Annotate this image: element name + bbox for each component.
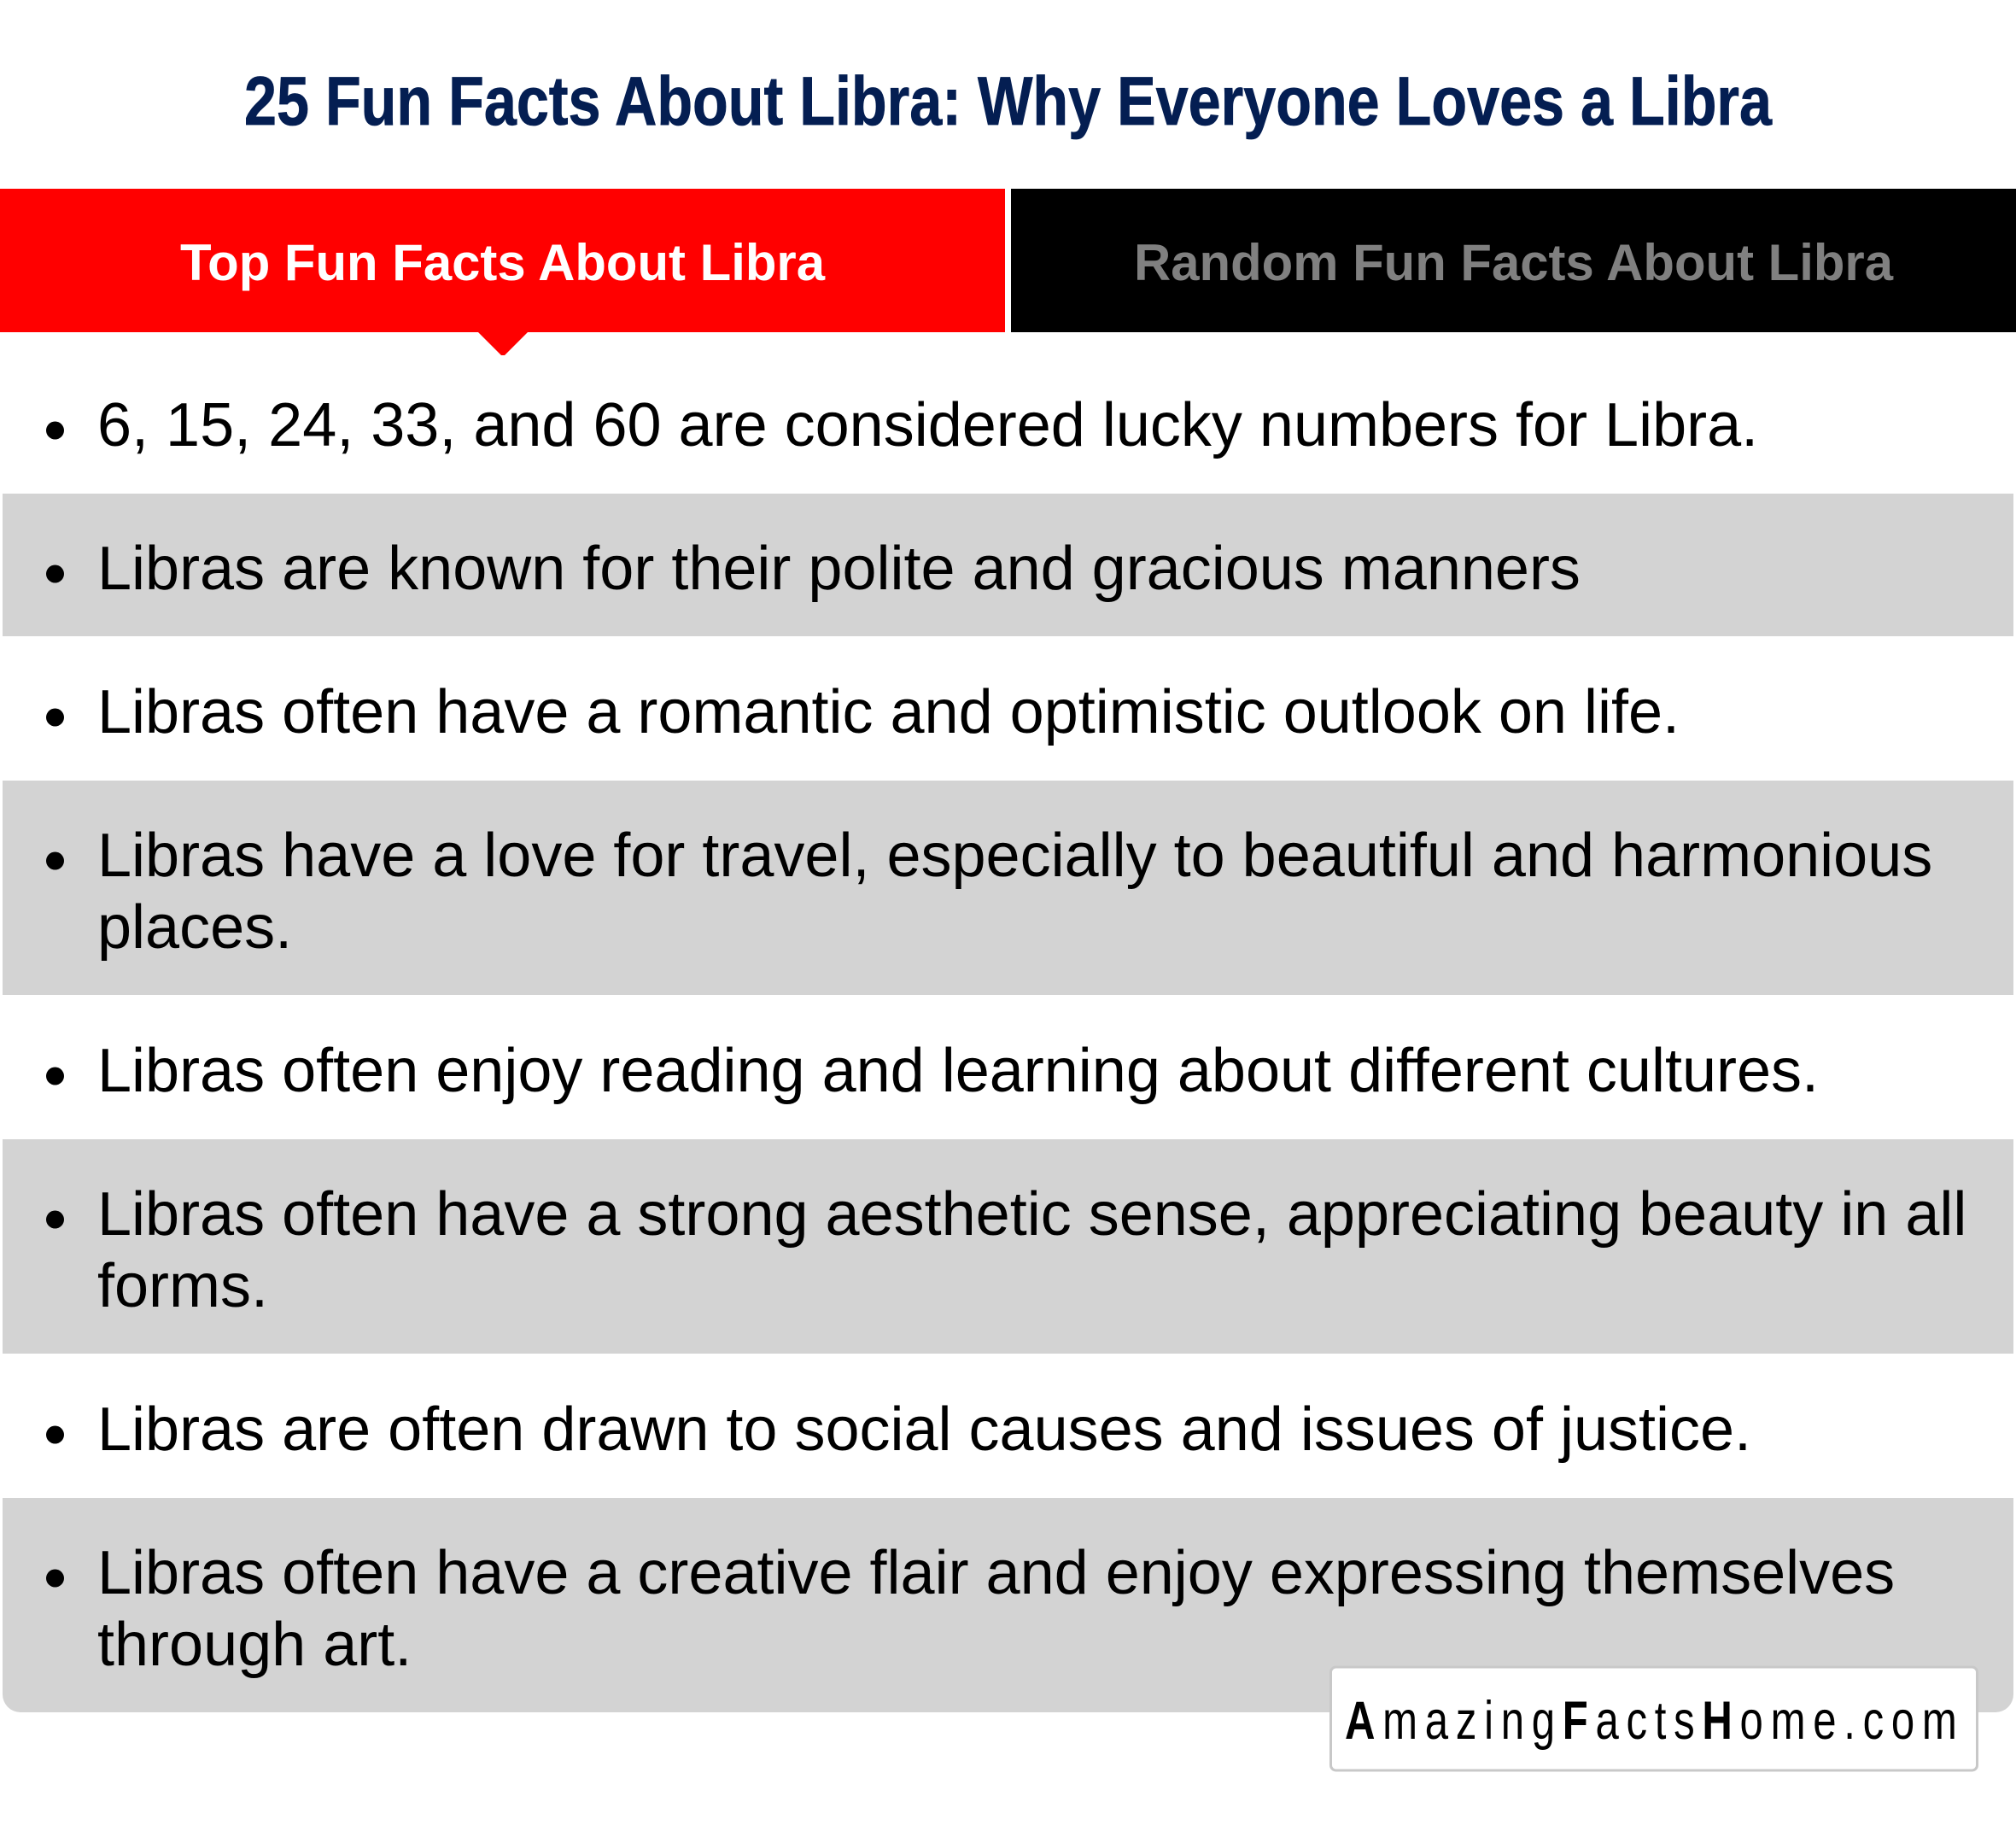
fact 2: Libras are known for their polite and gracious manners bbox=[97, 535, 1581, 603]
fact 5: Libras often enjoy reading and learning about different cultures. bbox=[97, 1037, 1819, 1105]
fact 8: Libras often have a creative flair and enjoy expressing themselves bbox=[97, 1539, 1895, 1607]
title: 25 Fun Facts About Libra: Why Everyone Loves a Libra bbox=[244, 63, 1773, 140]
tab: random fun facts (inactive): Random Fun Facts About Libra bbox=[1134, 234, 1894, 291]
tab: random fun facts (inactive) bbox=[1011, 189, 2016, 332]
fact list bbox=[3, 391, 2013, 1712]
watermark badge: AmazingFactsHome.com bbox=[1345, 1690, 1957, 1750]
fact 4 bbox=[3, 781, 2013, 995]
tab: top fun facts (active) bbox=[0, 189, 1005, 355]
fact 4: Libras have a love for travel, especially to beautiful and harmonious bbox=[97, 822, 1932, 890]
fact 7: Libras are often drawn to social causes and issues of justice. bbox=[97, 1395, 1751, 1464]
fact 6: forms. bbox=[97, 1252, 268, 1320]
watermark badge bbox=[1330, 1667, 1978, 1770]
fact 6: Libras often have a strong aesthetic sense, appreciating beauty in all bbox=[97, 1180, 1966, 1249]
fact 3: Libras often have a romantic and optimistic outlook on life. bbox=[97, 678, 1680, 746]
fact 6 bbox=[3, 1139, 2013, 1354]
fact 4: places. bbox=[97, 893, 292, 962]
fact 2 bbox=[3, 494, 2013, 636]
fact 8 bbox=[3, 1498, 2013, 1712]
tab: top fun facts (active): Top Fun Facts About Libra bbox=[180, 234, 826, 291]
fact 1: 6, 15, 24, 33, and 60 are considered lucky numbers for Libra. bbox=[97, 391, 1758, 459]
fact 8: through art. bbox=[97, 1611, 412, 1679]
